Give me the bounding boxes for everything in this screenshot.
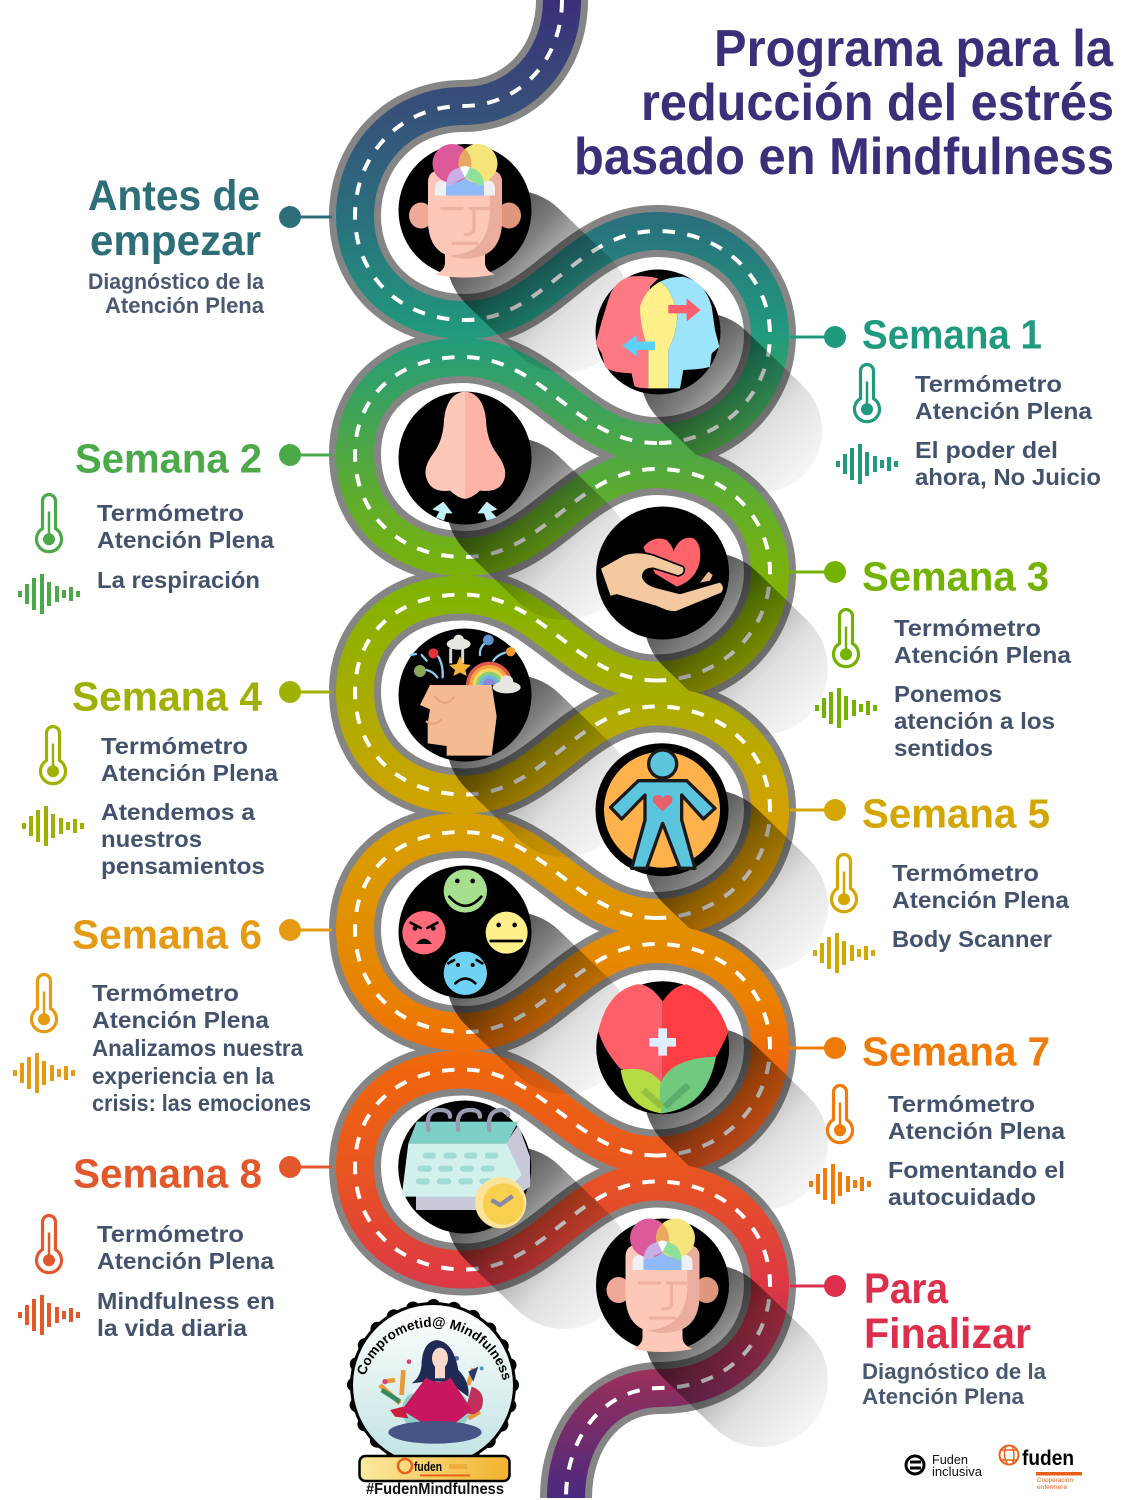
panel: semana 6: Termómetro bbox=[92, 980, 239, 1006]
panel: semana 2 bbox=[20, 436, 332, 614]
panel: semana 3: Semana 3 bbox=[862, 554, 1049, 600]
logo: fuden cooperación enfermera: Cooperación bbox=[1037, 1477, 1073, 1484]
logo: fuden cooperación enfermera bbox=[1000, 1446, 1082, 1491]
logo: fuden cooperación enfermera: fuden bbox=[1022, 1447, 1074, 1470]
panel: semana 6: experiencia en la bbox=[92, 1063, 274, 1089]
panel: semana 5: Body Scanner bbox=[892, 926, 1052, 952]
panel: semana 4: Atención Plena bbox=[101, 760, 278, 786]
icon: body scan figure bbox=[596, 743, 728, 876]
panel: semana 7: Atención Plena bbox=[888, 1118, 1065, 1144]
panel: semana 3: Ponemos bbox=[894, 681, 1002, 707]
logo: fuden inclusiva: inclusiva bbox=[932, 1465, 982, 1479]
title bbox=[574, 20, 1114, 186]
panel: semana 6: Analizamos nuestra bbox=[92, 1035, 303, 1061]
panel: semana 8 bbox=[20, 1150, 332, 1341]
panel: semana 8: Termómetro bbox=[97, 1221, 244, 1247]
panel: semana 3: Atención Plena bbox=[894, 642, 1071, 668]
panel: semana 8: la vida diaria bbox=[97, 1315, 247, 1341]
badge: comprometid@ mindfulness bbox=[347, 1299, 519, 1455]
panel: semana 1: El poder del bbox=[915, 437, 1058, 463]
panel: semana 7: Semana 7 bbox=[862, 1028, 1050, 1074]
logo: fuden inclusiva: Fuden bbox=[932, 1453, 968, 1467]
icon: nose breathing bbox=[398, 392, 532, 524]
panel: semana 2: La respiración bbox=[97, 567, 260, 593]
icon: mind with rainbow bbox=[398, 628, 532, 762]
panel: semana 1: Termómetro bbox=[915, 371, 1062, 397]
panel: semana 4: Semana 4 bbox=[72, 674, 262, 720]
panel: semana 4: Termómetro bbox=[101, 733, 248, 759]
panel: para finalizar: Finalizar bbox=[864, 1310, 1031, 1358]
icon: hand holding heart bbox=[596, 506, 729, 640]
panel: antes de empezar: Atención Plena bbox=[105, 293, 265, 318]
winding road bbox=[355, 0, 855, 1498]
panel: semana 3: sentidos bbox=[894, 735, 993, 761]
hashtag: #FudenMindfulness bbox=[366, 1481, 504, 1498]
icon: two faces with arrows bbox=[596, 270, 720, 394]
panel: semana 1: ahora, No Juicio bbox=[915, 464, 1101, 490]
panel: semana 4 bbox=[24, 674, 332, 879]
logo: fuden cooperación enfermera: enfermera bbox=[1037, 1484, 1067, 1491]
icon: head with colour mind bbox=[398, 144, 532, 278]
panel: semana 2: Atención Plena bbox=[97, 527, 274, 553]
panel: semana 1: Atención Plena bbox=[915, 398, 1092, 424]
panel: semana 7 bbox=[790, 1028, 1065, 1210]
icon: heart with plus and leaves bbox=[596, 981, 729, 1114]
icon: calendar with clock bbox=[398, 1100, 531, 1234]
panel: semana 2: Semana 2 bbox=[75, 436, 262, 482]
icon: emotion faces bbox=[398, 866, 532, 998]
panel: semana 7: Fomentando el bbox=[888, 1157, 1065, 1183]
panel: semana 5 bbox=[790, 790, 1069, 973]
panel: para finalizar: Diagnóstico de la bbox=[862, 1359, 1047, 1384]
ribbon: fuden bbox=[360, 1456, 510, 1481]
panel: semana 5: Termómetro bbox=[892, 860, 1039, 886]
badge: comprometid@ mindfulness: Comprometid@ Mindfulness bbox=[358, 1316, 510, 1380]
panel: semana 3: Termómetro bbox=[894, 615, 1041, 641]
panel: semana 5: Semana 5 bbox=[862, 790, 1050, 836]
panel: semana 4: Atendemos a bbox=[101, 799, 255, 825]
panel: antes de empezar: empezar bbox=[90, 217, 261, 265]
panel: semana 1: Semana 1 bbox=[862, 312, 1042, 358]
panel: semana 6: Atención Plena bbox=[92, 1007, 269, 1033]
panel: antes de empezar: Diagnóstico de la bbox=[88, 269, 265, 294]
panel: semana 8: Mindfulness en bbox=[97, 1288, 275, 1314]
icon: head with colour mind (final) bbox=[596, 1218, 729, 1352]
panel: para finalizar bbox=[790, 1265, 1047, 1409]
panel: semana 7: Termómetro bbox=[888, 1091, 1035, 1117]
panel: para finalizar: Atención Plena bbox=[862, 1384, 1025, 1409]
panel: semana 2: Termómetro bbox=[97, 500, 244, 526]
panel: semana 4: pensamientos bbox=[101, 853, 265, 879]
panel: semana 6: Semana 6 bbox=[72, 912, 262, 958]
panel: semana 6 bbox=[15, 912, 332, 1116]
panel: semana 7: autocuidado bbox=[888, 1184, 1036, 1210]
panel: antes de empezar: Antes de bbox=[88, 172, 260, 220]
panel: semana 4: nuestros bbox=[101, 826, 202, 852]
panel: semana 3: atención a los bbox=[894, 708, 1055, 734]
ribbon: fuden: fuden bbox=[414, 1459, 442, 1474]
panel: para finalizar: Para bbox=[864, 1265, 949, 1313]
panel: semana 6: crisis: las emociones bbox=[92, 1090, 311, 1116]
panel: antes de empezar bbox=[88, 172, 332, 318]
panel: semana 1 bbox=[790, 312, 1101, 490]
panel: semana 5: Atención Plena bbox=[892, 887, 1069, 913]
logo: fuden inclusiva bbox=[906, 1453, 982, 1479]
panel: semana 8: Semana 8 bbox=[73, 1150, 262, 1196]
panel: semana 3 bbox=[790, 554, 1071, 761]
panel: semana 8: Atención Plena bbox=[97, 1248, 274, 1274]
